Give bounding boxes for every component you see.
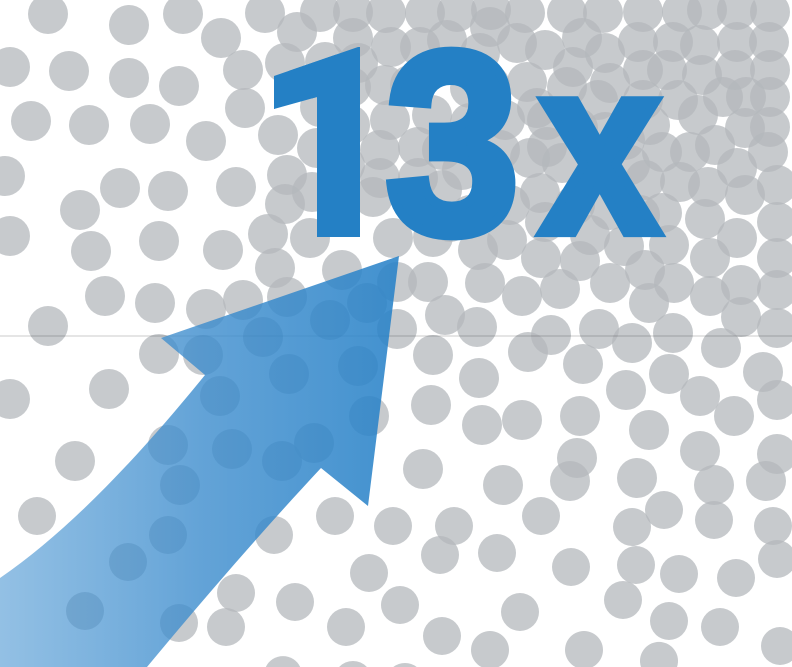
letter x: x: [541, 8, 659, 284]
horizontal reference line: [0, 335, 792, 337]
digit 1: 1: [250, 0, 397, 294]
headline: 13x: [274, 46, 666, 240]
digit 3: 3: [386, 0, 519, 287]
arrow: curved blue gradient arrow pointing up-right: [0, 256, 399, 667]
